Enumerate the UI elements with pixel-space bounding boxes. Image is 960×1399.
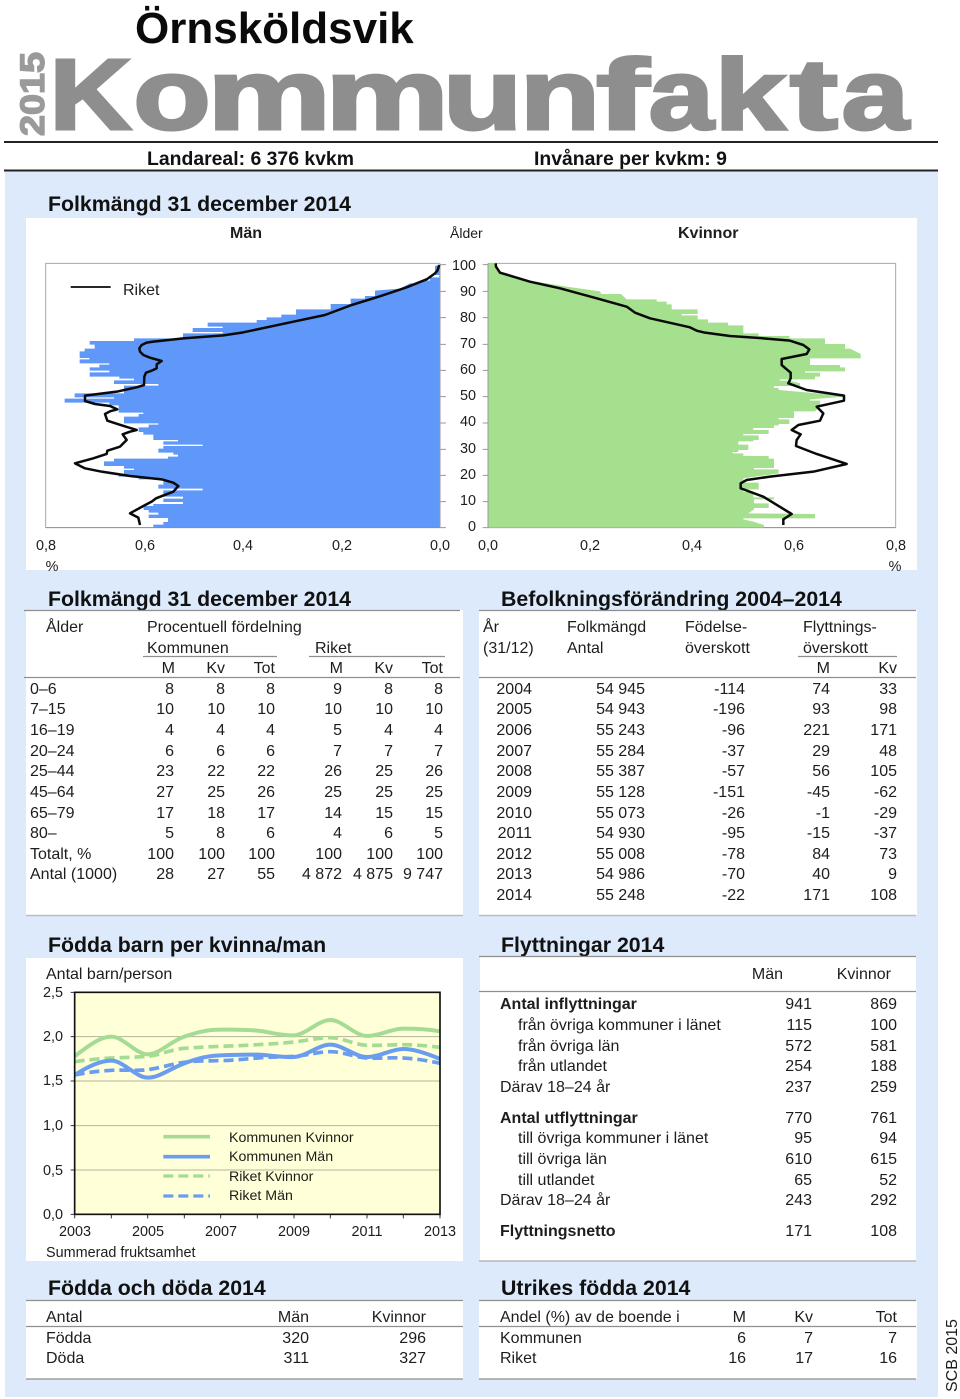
rows: 6 [266,743,275,760]
key facts [147,147,727,170]
age axis labels: 20 [460,467,476,483]
heading: migration: Flyttningar 2014 [501,933,664,957]
x axis: 2011 [352,1224,382,1240]
outflows: 615 [870,1151,897,1168]
rows: 93 [812,701,830,718]
panel: population change table: Flyttnings- [803,619,877,636]
x axis labels: 0,4 [233,538,253,554]
y axis [43,985,63,1223]
y axis: 0,5 [43,1163,63,1179]
rows: 2013 [496,866,532,883]
rows: -29 [874,805,897,822]
rows: -57 [722,763,745,780]
rows: 4 [384,722,393,739]
panel: age distribution table: Tot [254,660,276,677]
chart: men pyramid [46,263,446,528]
panel: age distribution table: Tot [422,660,444,677]
series: Riket Män [75,1052,440,1075]
inflows: från utlandet [518,1057,608,1075]
panel: age distribution table: Riket [315,640,352,657]
rows: -78 [722,846,745,863]
panel: births and deaths table: Antal [46,1309,82,1326]
outflows: 292 [870,1192,897,1209]
outflows: 243 [785,1192,812,1209]
rows: 4 875 [353,866,393,883]
logo: Kommunfakta: a [842,39,911,151]
outflows: 610 [785,1151,812,1168]
rows: 7 [333,743,342,760]
panel: fertility chart: Summerad fruktsamhet [46,1245,196,1261]
rows: 7–15 [30,701,66,718]
rows: 4 872 [302,866,342,883]
rows: 2005 [496,701,532,718]
rows: 25 [324,784,342,801]
legend: Kommunen Kvinnor [229,1130,354,1146]
panel: population change table: överskott [803,640,868,657]
outflows: till övriga kommuner i länet [518,1130,709,1147]
inflows: 115 [786,1017,812,1034]
rows: 6 [266,825,275,842]
line: Riket women [496,263,847,525]
rows: 4 [434,722,443,739]
age axis labels: 90 [460,284,476,300]
rows: 54 986 [596,866,645,883]
outflows: till övriga län [518,1151,607,1168]
rows: 23 [156,763,174,780]
panel: foreign born table: 7 [804,1330,813,1347]
rows: 55 387 [596,763,645,780]
panel: population pyramid: Kvinnor [678,225,738,242]
heading: foreign born: Utrikes födda 2014 [501,1276,691,1300]
outflows: Antal utflyttningar [500,1110,638,1127]
rows: 55 [257,866,275,883]
panel: migration table [479,956,916,1261]
rows: 26 [425,763,443,780]
panel: population change table: (31/12) [483,640,534,657]
rows: -70 [722,866,745,883]
rows: -114 [714,681,745,698]
rows: 25–44 [30,763,75,780]
rows: 65–79 [30,805,75,822]
rows: 14 [324,805,342,822]
rows: 25 [207,784,225,801]
rows: 8 [165,681,174,698]
rows: -45 [807,784,830,801]
logo: Kommunfakta: n [520,39,600,151]
rows: 10 [425,701,443,718]
inflows [500,996,897,1096]
rows: Antal (1000) [30,866,117,883]
series: Riket Kvinnor [75,1038,440,1062]
age axis labels: 70 [460,336,476,352]
panel: births and deaths table: 296 [399,1330,426,1347]
rows: 4 [216,722,225,739]
rows: -37 [722,743,745,760]
rows: -37 [874,825,897,842]
series: Kommunen Män [75,1045,440,1078]
rows: 27 [207,866,225,883]
inflows: från övriga kommuner i länet [518,1016,721,1034]
panel: age distribution table: Kommunen [147,640,229,657]
rows: 8 [384,681,393,698]
panel: births and deaths table: 320 [282,1330,309,1347]
rows: 2010 [496,805,532,822]
y axis: 1,5 [43,1073,63,1089]
panel: population pyramid: Ålder [450,225,483,241]
rows: 100 [147,846,174,863]
rows: 26 [257,784,275,801]
x axis: 2007 [205,1224,237,1240]
rows: 25 [375,763,393,780]
rows: 54 945 [596,681,645,698]
outflows: 94 [879,1130,897,1147]
panel: foreign born table: Riket [500,1350,537,1367]
rows: 55 248 [596,887,645,904]
panel: fertility chart [26,958,463,1261]
panel: age distribution table: Ålder [46,617,84,636]
panel: population change table: överskott [685,640,750,657]
logo: Kommunfakta: f [596,39,650,151]
logo: Kommunfakta: 2015 [14,52,52,136]
legend swatches [163,1131,210,1142]
rows: 54 943 [596,701,645,718]
outflows: 65 [794,1172,812,1189]
rows: 8 [216,825,225,842]
panel: births and deaths table: 311 [283,1350,309,1367]
logo: Kommunfakta: m [208,39,331,151]
x axis labels: 0,0 [478,538,498,554]
rows: 2008 [496,763,532,780]
inflows: 254 [785,1058,812,1075]
panel: migration table: Män [752,966,783,983]
x axis: 2009 [278,1224,310,1240]
inflows: 869 [870,996,897,1013]
logo: Kommunfakta: t [790,39,838,151]
rows: 105 [870,763,897,780]
rows: 55 073 [596,805,645,822]
rows: 84 [812,846,830,863]
rows: 54 930 [596,825,645,842]
rows: -15 [807,825,830,842]
rows: 28 [156,866,174,883]
logo: Kommunfakta: k [715,39,786,151]
panel: foreign born table: Kv [794,1309,813,1326]
panel: births and deaths table [26,1300,463,1379]
rows: 22 [257,763,275,780]
age axis labels: 0 [468,519,476,535]
rows: 15 [375,805,393,822]
legend: Riket Män [229,1188,293,1204]
x axis labels: 0,2 [580,538,600,554]
panel: foreign born table: Kommunen [500,1330,582,1347]
x axis labels: 0,8 [36,538,56,554]
rows: Totalt, % [30,846,91,863]
x axis labels: 0,4 [682,538,702,554]
age axis labels: 10 [460,493,476,509]
panel: age distribution table: Procentuell fördelning [147,619,302,636]
x axis labels: 0,6 [135,538,155,554]
rows: 2006 [496,722,532,739]
logo: Kommunfakta: o [133,39,211,151]
net migration: 108 [870,1223,897,1240]
rows: 9 [888,866,897,883]
rows: 171 [870,722,897,739]
rows: 2014 [496,887,532,904]
panel: births and deaths table: Döda [46,1350,84,1367]
x axis [59,1224,456,1240]
heading: age table: Folkmängd 31 december 2014 [48,587,351,611]
rows: -96 [722,722,745,739]
age axis labels: 100 [452,258,476,274]
rows: 2004 [496,681,532,698]
age axis labels [452,258,476,535]
net migration [500,1223,897,1240]
panel: age distribution table: Kv [206,660,225,677]
rows: 6 [165,743,174,760]
panel: foreign born table: 16 [879,1350,897,1367]
outflows: 52 [879,1172,897,1189]
legend [229,1130,354,1204]
logo: Kommunfakta: K [50,39,131,151]
rows: 4 [165,722,174,739]
rows: 55 284 [596,743,645,760]
outflows: 95 [794,1130,812,1147]
heading: fertility: Födda barn per kvinna/man [48,933,326,957]
rows: 2009 [496,784,532,801]
rows: 17 [257,805,275,822]
rows: -95 [722,825,745,842]
line chart [71,992,440,1218]
panel: foreign born table: 7 [888,1330,897,1347]
panel: population change table [479,610,917,916]
rows: 33 [879,681,897,698]
rows: 100 [198,846,225,863]
rows: 100 [248,846,275,863]
rows: -22 [722,887,745,904]
age axis labels: 80 [460,310,476,326]
rows: 26 [324,763,342,780]
x axis labels [36,538,906,575]
inflows: 941 [785,996,812,1013]
rows: 55 128 [596,784,645,801]
rows: 6 [216,743,225,760]
x axis labels: % [46,559,59,575]
key facts: Landareal: 6 376 kvkm [147,148,354,170]
rows: 15 [425,805,443,822]
rows: 108 [870,887,897,904]
rows: 45–64 [30,784,75,801]
panel: population change table: Födelse- [685,619,747,636]
rows: 6 [384,825,393,842]
inflows: 581 [870,1038,897,1055]
heading: population pyramid: Folkmängd 31 december 2014 [48,192,351,216]
x axis: 2013 [424,1224,456,1240]
inflows: Antal inflyttningar [500,996,637,1013]
net migration: Flyttningsnetto [500,1223,616,1240]
x axis labels: 0,8 [886,538,906,554]
key facts: Invånare per kvkm: 9 [534,147,727,170]
rows: -151 [713,784,745,801]
outflows: 761 [870,1110,897,1127]
rows: -1 [816,805,830,822]
rows: 25 [375,784,393,801]
y axis: 1,0 [43,1118,63,1134]
logo: Kommunfakta: a [649,39,715,151]
rows: 16–19 [30,722,75,739]
panel: population change table: M [817,660,830,677]
rows: 17 [156,805,174,822]
heading: population change: Befolkningsförändring 2004–2014 [501,587,842,611]
panel: population pyramid [26,218,917,575]
rows: 0–6 [30,681,57,698]
rows: 10 [375,701,393,718]
panel: age distribution table: M [162,660,175,677]
panel: foreign born table: Andel (%) av de boende i [500,1309,680,1326]
panel: population change table: Antal [567,640,603,657]
age axis labels: 60 [460,362,476,378]
y axis: 0,0 [43,1207,63,1223]
rows: 18 [207,805,225,822]
panel: population change table: År [483,617,500,636]
panel: age distribution table: M [330,660,343,677]
rows: 2007 [496,743,532,760]
rows: 8 [434,681,443,698]
rows: 100 [315,846,342,863]
rows: 5 [165,825,174,842]
rows: 40 [812,866,830,883]
y axis: 2,5 [43,985,63,1001]
inflows: 100 [870,1017,897,1034]
x axis labels: 0,6 [784,538,804,554]
rows: 8 [266,681,275,698]
rows: 80– [30,825,57,842]
panel: age distribution table [24,610,463,916]
rows: 4 [333,825,342,842]
rows: 27 [156,784,174,801]
panel: age distribution table: Kv [374,660,393,677]
age axis labels: 50 [460,388,476,404]
age axis labels: 30 [460,441,476,457]
outflows: till utlandet [518,1172,595,1189]
x axis labels: % [889,559,902,575]
rows: 7 [434,743,443,760]
outflows [500,1110,897,1209]
net migration: 171 [785,1223,812,1240]
rows: -26 [722,805,745,822]
inflows: från övriga län [518,1037,619,1055]
rows: 55 243 [596,722,645,739]
rows: 10 [324,701,342,718]
panel: population pyramid: Män [230,225,262,242]
rows: 9 [333,681,342,698]
rows: 98 [879,701,897,718]
rows: 55 008 [596,846,645,863]
rows: -196 [713,701,745,718]
panel: births and deaths table: 327 [399,1350,426,1367]
logo: Kommunfakta: u [443,39,522,151]
legend: Kommunen Män [229,1149,333,1165]
rows: 74 [812,681,830,698]
panel: population change table: Folkmängd [567,619,646,636]
title: Örnsköldsvik [135,4,414,53]
rows: 5 [434,825,443,842]
legend: Riket: Riket [123,282,160,299]
rows: 5 [333,722,342,739]
rows: 56 [812,763,830,780]
rows: 73 [879,846,897,863]
rows: 100 [366,846,393,863]
rows: -62 [874,784,897,801]
panel: births and deaths table: Födda [46,1330,91,1347]
logo: Kommunfakta: m [326,39,449,151]
rows: 100 [416,846,443,863]
x axis labels: 0,2 [332,538,352,554]
rows: 10 [156,701,174,718]
rows: 171 [803,887,830,904]
x axis: 2003 [59,1224,91,1240]
inflows: Därav 18–24 år [500,1078,611,1096]
age axis labels: 40 [460,414,476,430]
outflows: 770 [785,1110,812,1127]
panel: foreign born table: M [733,1309,746,1326]
panel: foreign born table: 6 [737,1330,746,1347]
chart: women pyramid [483,263,896,528]
panel: fertility chart: Antal barn/person [46,966,172,983]
legend: Riket Kvinnor [229,1169,314,1185]
panel: population change table: Kv [878,660,897,677]
rows: 29 [812,743,830,760]
rows: 9 747 [403,866,443,883]
panel: foreign born table [479,1300,917,1379]
series: Kommunen Kvinnor [75,1020,440,1056]
y axis: 2,0 [43,1029,63,1045]
heading: births and deaths: Födda och döda 2014 [48,1276,266,1300]
rows: 22 [207,763,225,780]
x axis: 2005 [132,1224,164,1240]
x axis labels: 0,0 [430,538,450,554]
inflows: 259 [870,1079,897,1096]
rows: 10 [257,701,275,718]
rows: 2012 [496,846,532,863]
logo: Kommunfakta [14,39,911,151]
outflows: Därav 18–24 år [500,1191,611,1209]
panel: births and deaths table: Kvinnor [372,1309,427,1326]
panel: migration table: Kvinnor [837,966,892,983]
panel: foreign born table: 16 [728,1350,746,1367]
inflows: 188 [870,1058,897,1075]
panel: foreign born table: 17 [795,1350,813,1367]
rows [496,681,897,904]
rows: 25 [425,784,443,801]
inflows: 237 [785,1079,812,1096]
rows [30,681,443,883]
line: Riket men [75,265,439,525]
panel: births and deaths table: Män [278,1309,309,1326]
rows: 4 [266,722,275,739]
rows: 221 [803,722,830,739]
inflows: 572 [785,1038,812,1055]
panel: foreign born table: Tot [876,1309,898,1326]
rows: 10 [207,701,225,718]
rows: 7 [384,743,393,760]
rows: 20–24 [30,743,75,760]
rows: 2011 [498,825,532,842]
rows: 8 [216,681,225,698]
rows: 48 [879,743,897,760]
